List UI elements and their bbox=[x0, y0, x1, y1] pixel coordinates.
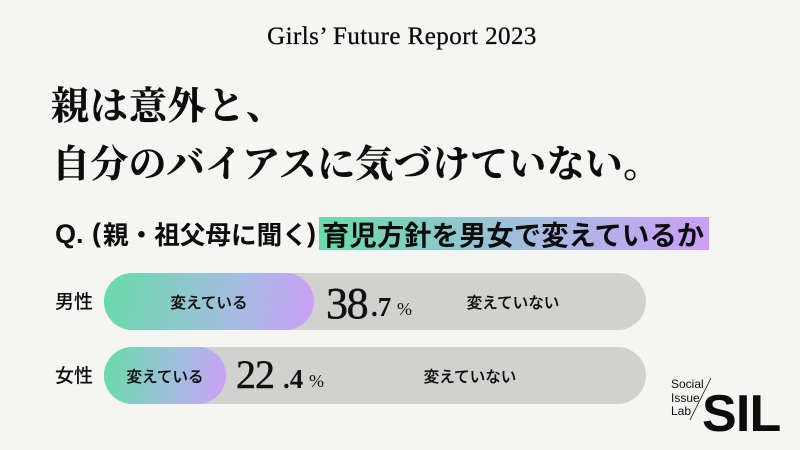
question label: ) bbox=[307, 218, 316, 248]
female value: 22 bbox=[236, 352, 274, 397]
header: report name: Girls’ Future Report 2023 bbox=[267, 23, 537, 50]
row label: male: 男性 bbox=[55, 287, 93, 314]
question label: ( bbox=[92, 218, 101, 248]
row label: female: 女性 bbox=[55, 361, 93, 388]
female bar track bbox=[104, 347, 646, 404]
male label: changing: 変えている bbox=[170, 291, 248, 313]
male bar track bbox=[104, 273, 646, 330]
female value bbox=[236, 352, 324, 397]
female bar fill bbox=[104, 347, 226, 404]
female label: not changing: 変えていない bbox=[424, 365, 516, 387]
female value: % bbox=[309, 371, 324, 391]
question highlighted text: 育児方針を男女で変えているか bbox=[322, 213, 704, 253]
male label: not changing: 変えていない bbox=[467, 291, 559, 313]
question label: 親・祖父母に聞く bbox=[103, 215, 308, 252]
female value: .4 bbox=[283, 364, 303, 394]
title line 1: 親は意外と、 bbox=[51, 75, 285, 130]
male value: 38 bbox=[326, 280, 368, 328]
title line 2: 自分のバイアスに気づけていない。 bbox=[52, 133, 661, 188]
male value bbox=[326, 280, 412, 328]
logo: Social Issue Lab bbox=[671, 377, 780, 443]
logo: Social Issue Lab: Lab bbox=[671, 404, 691, 418]
male value: % bbox=[397, 299, 412, 319]
logo: Social Issue Lab: Social bbox=[671, 377, 704, 391]
logo: Social Issue Lab: Issue bbox=[671, 391, 700, 405]
female label: changing: 変えている bbox=[126, 365, 204, 387]
question label: Q. bbox=[55, 219, 84, 249]
logo: Social Issue Lab: SIL bbox=[702, 385, 780, 443]
male bar fill bbox=[104, 273, 314, 330]
male value: .7 bbox=[371, 292, 391, 322]
